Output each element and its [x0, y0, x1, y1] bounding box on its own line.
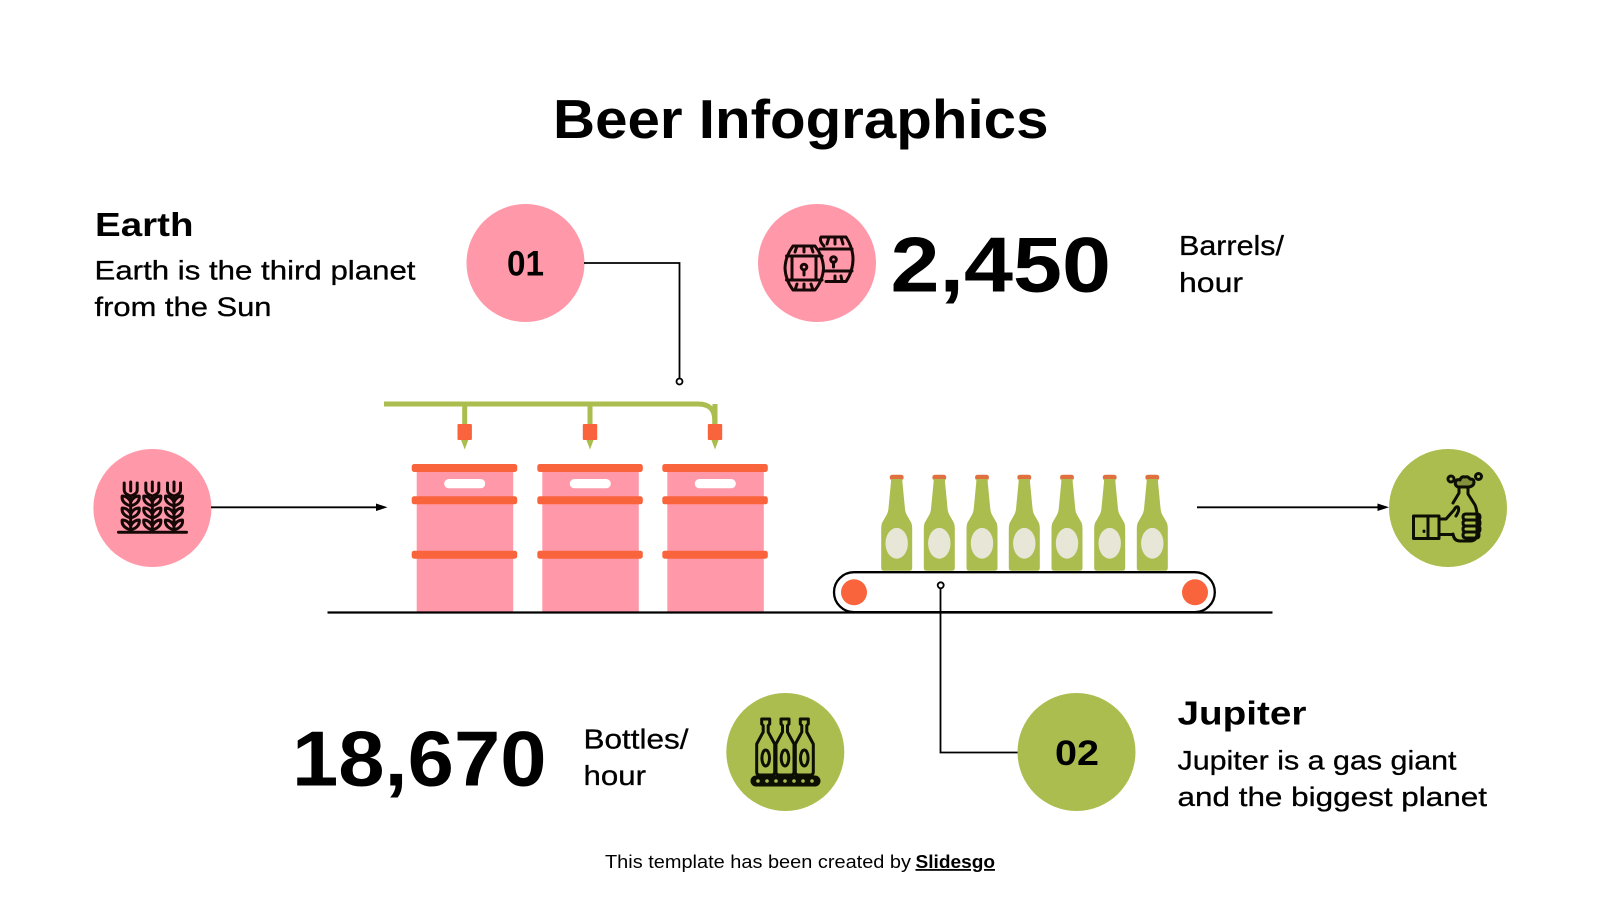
- stat: 18,670: 18,670: [292, 715, 546, 803]
- stat label: bottles per hour: [584, 724, 689, 791]
- description: Earth: from the Sun: [94, 292, 272, 322]
- description: Jupiter: Jupiter is a gas giant: [1178, 746, 1457, 776]
- footer credit: Slidesgo: [916, 852, 995, 872]
- arrow: bottles to cheers: [1197, 504, 1389, 511]
- text block: Jupiter: [1178, 694, 1488, 812]
- arrow: wheat to kegs: [211, 504, 388, 511]
- stat label: barrels per hour: hour: [1179, 267, 1243, 298]
- description: Earth: [94, 256, 416, 322]
- stat: 2,450: 2,450: [890, 221, 1111, 309]
- connector: 01 to pipe: [584, 263, 682, 384]
- heading: Jupiter: Jupiter: [1178, 694, 1307, 732]
- description: Jupiter: and the biggest planet: [1178, 782, 1488, 812]
- conveyor belt: [834, 572, 1215, 612]
- icon: wheat badge: [93, 449, 211, 567]
- bottles row: [881, 475, 1168, 571]
- icon: bottling badge: [726, 693, 844, 811]
- stat label: bottles per hour: hour: [584, 760, 646, 791]
- pipe with nozzles: [384, 404, 722, 450]
- description: Jupiter: [1178, 746, 1488, 812]
- title: Beer Infographics: [553, 88, 1048, 150]
- stat label: barrels per hour: [1179, 230, 1284, 298]
- marker 01: [466, 204, 584, 322]
- icon: hand with bottle: [1414, 474, 1482, 541]
- marker 01: 01: [507, 244, 544, 284]
- text block: Earth: [94, 206, 416, 322]
- icon: cheers badge: [1389, 449, 1507, 567]
- floor line: [328, 611, 1272, 614]
- stat label: barrels per hour: Barrels/: [1179, 230, 1284, 261]
- description: Earth: Earth is the third planet: [94, 256, 416, 286]
- stat label: bottles per hour: Bottles/: [584, 724, 689, 754]
- icon: wheat: [118, 482, 186, 532]
- icon: barrels badge: [758, 204, 876, 322]
- kegs: [412, 464, 768, 612]
- connector: conveyor to 02: [938, 582, 1018, 752]
- footer credit: This template has been created by: [605, 852, 911, 872]
- marker 02: 02: [1055, 734, 1099, 773]
- marker 02: [1018, 693, 1136, 811]
- icon: bottles on belt: [752, 719, 819, 785]
- heading: Earth: Earth: [95, 206, 194, 243]
- icon: barrels: [785, 237, 853, 290]
